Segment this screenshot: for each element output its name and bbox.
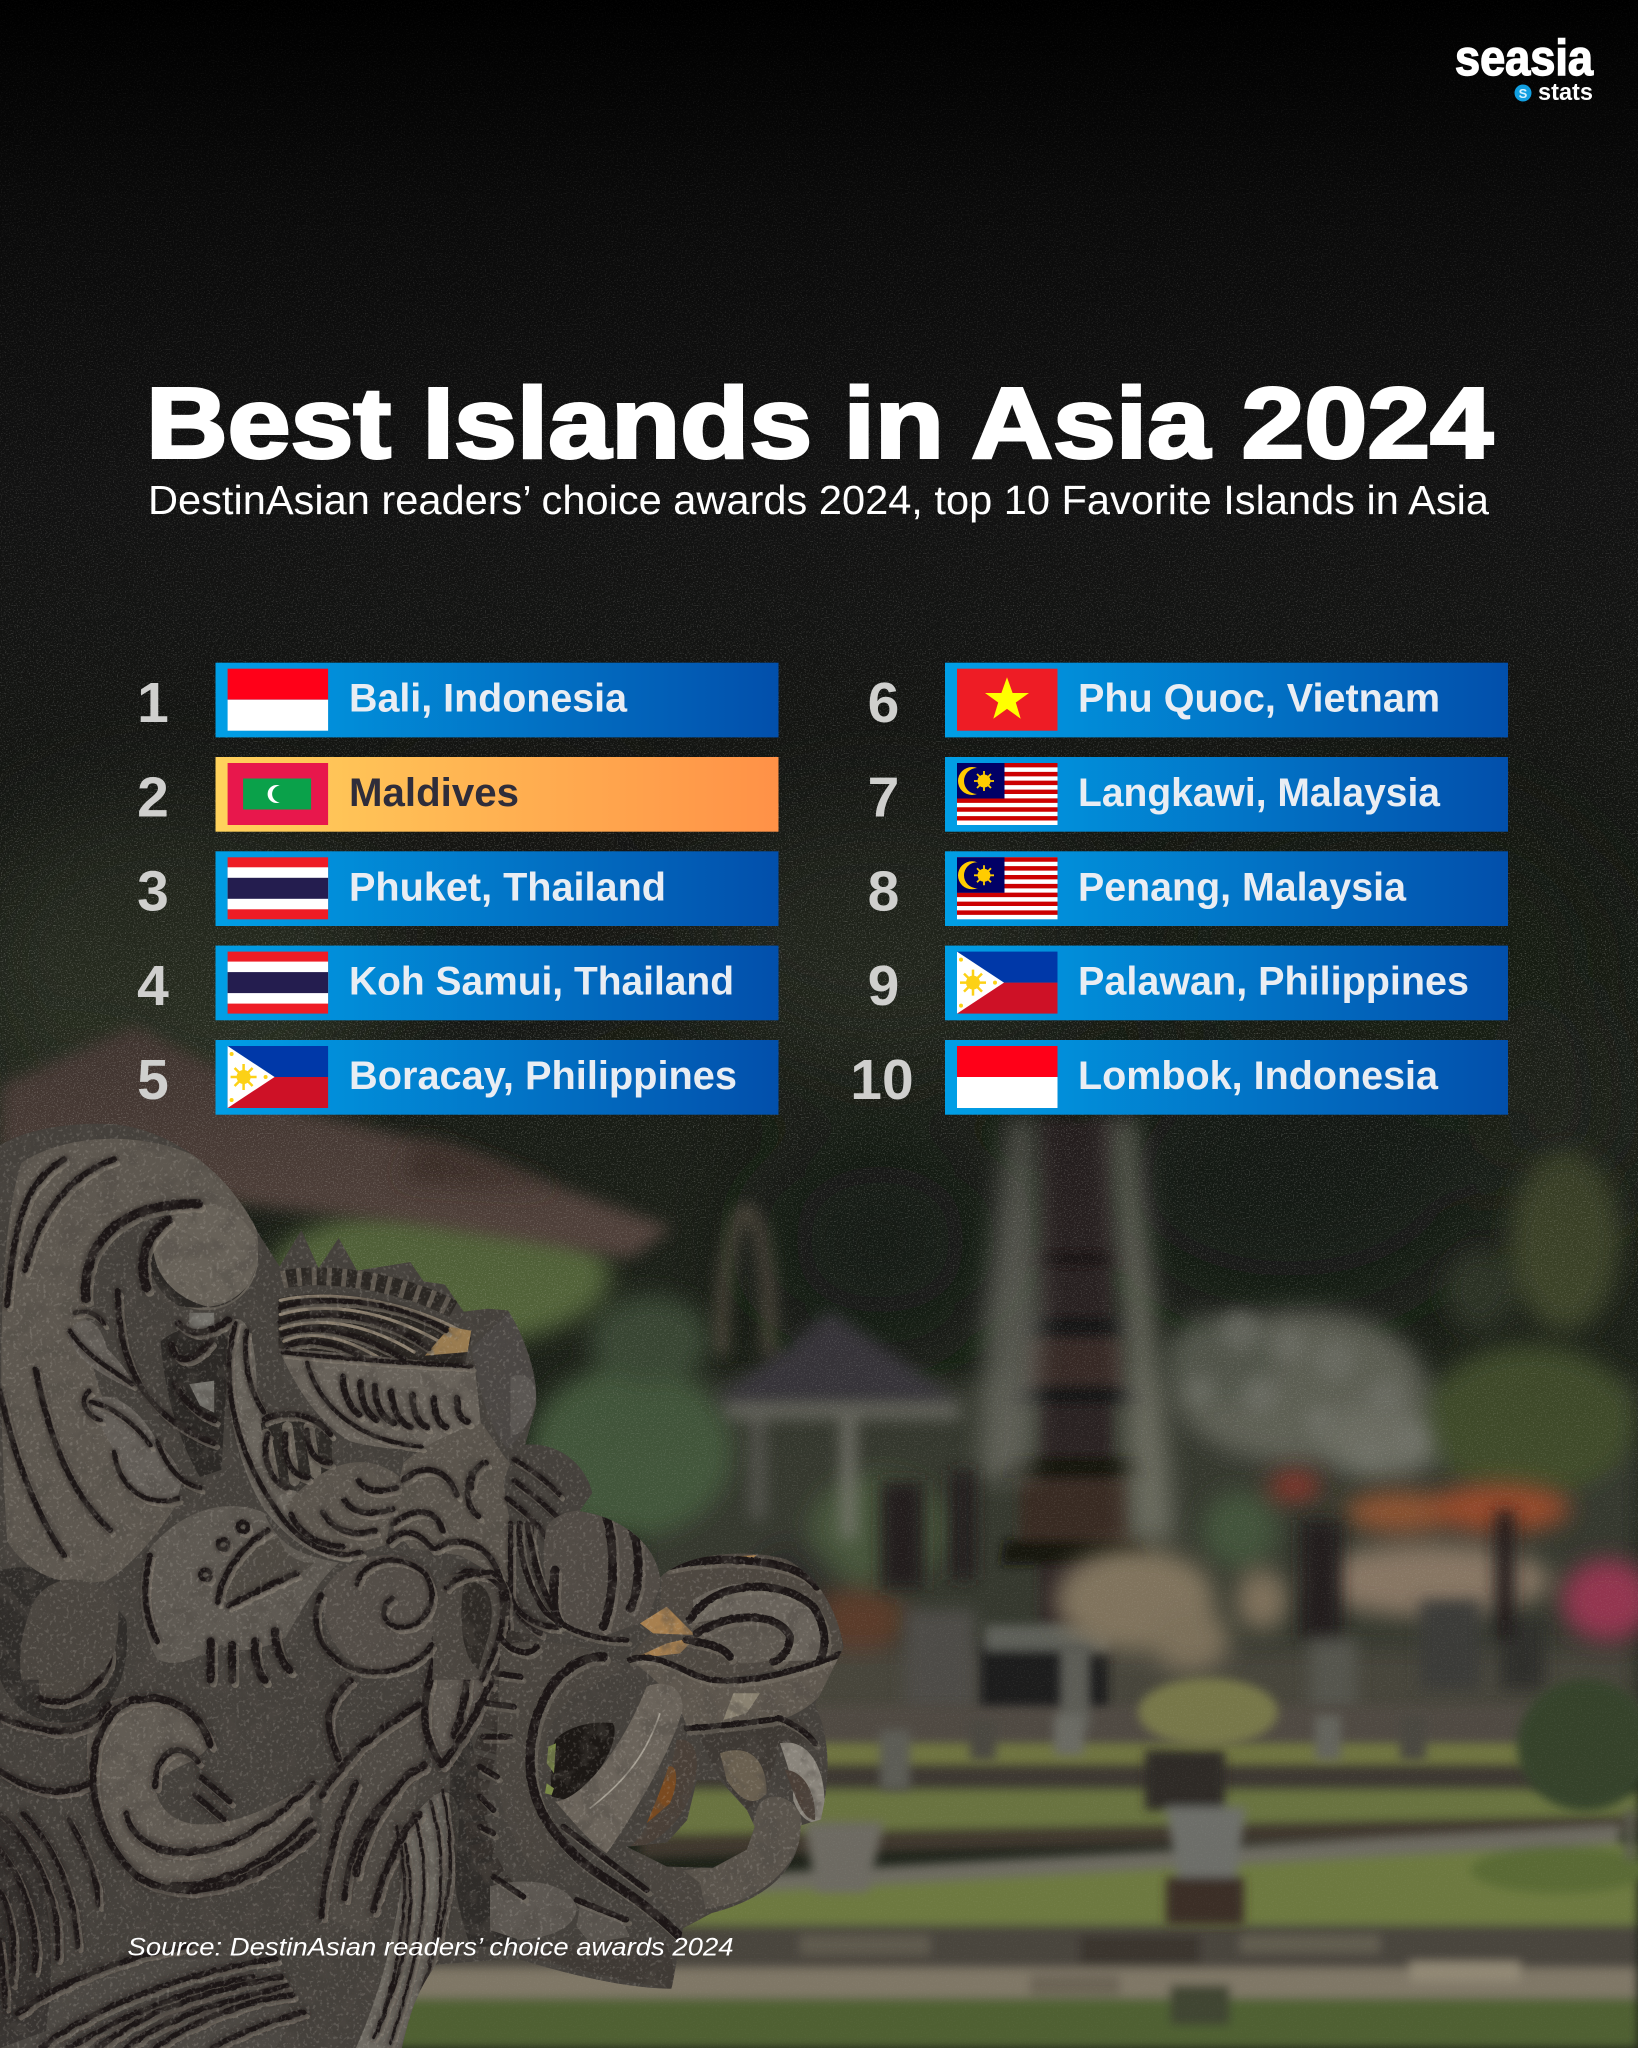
scale plate	[286, 1462, 400, 1556]
rank 9	[868, 946, 1508, 1020]
flowering bushes	[1055, 1473, 1638, 1672]
side horn	[471, 1311, 536, 1448]
lower garden base	[270, 1150, 1638, 1760]
nostril cavity	[551, 1722, 615, 1800]
rank 4: Koh Samui, Thailand	[349, 960, 734, 1004]
rank 3	[137, 851, 778, 926]
rank 5: 5	[137, 1048, 169, 1112]
crown ridge plate	[278, 1294, 471, 1366]
rank 5	[137, 1040, 778, 1115]
rank 10	[850, 1040, 1508, 1115]
rank 6: Phu Quoc, Vietnam	[1078, 677, 1440, 721]
recess behind lobes	[161, 1326, 228, 1477]
stone dragon sculpture	[0, 1124, 844, 2048]
eye barrel	[544, 1510, 660, 1637]
rust patches	[627, 1555, 757, 1662]
beaded fangs	[476, 1632, 519, 1904]
shoulder rosette stone	[20, 1579, 118, 1680]
small inner crescent	[630, 1740, 697, 1847]
lower carving layers	[3, 1552, 543, 2048]
title: Best Islands in Asia 2024	[146, 368, 1493, 480]
rank 8	[868, 851, 1508, 926]
ranking list: left column	[137, 663, 778, 1115]
bokeh blossoms on the white tree	[1185, 1310, 1425, 1463]
upper lip bowl	[630, 1653, 843, 1727]
forehead plate	[278, 1348, 482, 1450]
ear column	[432, 1573, 507, 1680]
green foliage behind dragon	[270, 1203, 610, 1347]
left rosette shadow	[0, 1567, 127, 1723]
rank 3: 3	[137, 860, 169, 924]
rank 6	[868, 663, 1508, 737]
rank 1: Bali, Indonesia	[349, 677, 628, 721]
rank 1: 1	[137, 671, 169, 735]
gazebo	[712, 1210, 960, 1539]
ornament lobes	[68, 1320, 181, 1499]
carved grooves	[3, 1164, 563, 1684]
rank 6: 6	[868, 671, 899, 735]
rank 7	[868, 757, 1508, 832]
rank 5: Boracay, Philippines	[349, 1054, 737, 1098]
flower crest	[389, 1423, 513, 1584]
rank 2: Maldives	[349, 771, 519, 815]
dark pillars and statues	[880, 1470, 1545, 1710]
rank 10: 10	[850, 1048, 914, 1112]
lower ring jaw	[667, 1797, 802, 1912]
dragon body: traced in a local coordinate frame	[0, 1124, 844, 2048]
garden terraces	[380, 1706, 1638, 2048]
source note: Source: DestinAsian readers’ choice awards 2024	[128, 1934, 734, 1962]
rank 8: Penang, Malaysia	[1078, 865, 1407, 909]
snout top	[627, 1552, 843, 1680]
cheek rim	[496, 1641, 623, 1873]
logo: seasia stats: seasia	[1455, 30, 1594, 86]
rank 4: 4	[137, 954, 169, 1018]
rank 10: Lombok, Indonesia	[1078, 1054, 1439, 1098]
logo: seasia stats: stats	[1538, 79, 1593, 106]
icon: blue logo dot: S	[1519, 86, 1528, 101]
jaw carved grooves	[483, 1521, 846, 1941]
fence posts, planters, green bush	[804, 1645, 1638, 1925]
rank 3: Phuket, Thailand	[349, 865, 666, 909]
white flowering tree	[1175, 1310, 1425, 1460]
ranking list: right column	[850, 663, 1508, 1115]
under-lip mass	[697, 1718, 820, 1810]
upper tusk	[555, 1684, 683, 1853]
subtitle: DestinAsian readers’ choice awards 2024, top 10 Favorite Islands in Asia	[148, 477, 1489, 523]
band left of forehead	[227, 1319, 361, 1563]
scroll band and curl	[1, 1139, 258, 1583]
rank 8: 8	[868, 860, 899, 924]
pagoda tower and fountains	[978, 1120, 1150, 1715]
head and scroll: upper carvings	[0, 1139, 563, 1684]
rank 2: 2	[137, 766, 169, 830]
chin blocks	[490, 1881, 577, 1940]
forest foliage	[0, 730, 1638, 1350]
temple roof	[0, 1025, 672, 1258]
snout, jaw, tusks	[480, 1510, 846, 1990]
logo: seasia stats	[1455, 30, 1594, 106]
right fang	[780, 1743, 825, 1822]
rank 9: 9	[868, 954, 899, 1018]
rank 7: Langkawi, Malaysia	[1078, 771, 1441, 815]
rank 1	[137, 663, 778, 737]
rank 9: Palawan, Philippines	[1078, 960, 1469, 1004]
rank 2	[137, 757, 778, 832]
wave ridges	[261, 1414, 332, 1491]
lower body forms	[87, 1659, 494, 2048]
rank 4	[137, 946, 778, 1020]
rank 7: 7	[868, 766, 899, 830]
right pine	[1510, 1150, 1620, 1330]
cheek	[141, 1506, 339, 1663]
swirl	[321, 1555, 438, 1672]
knob under lip	[720, 1750, 767, 1801]
